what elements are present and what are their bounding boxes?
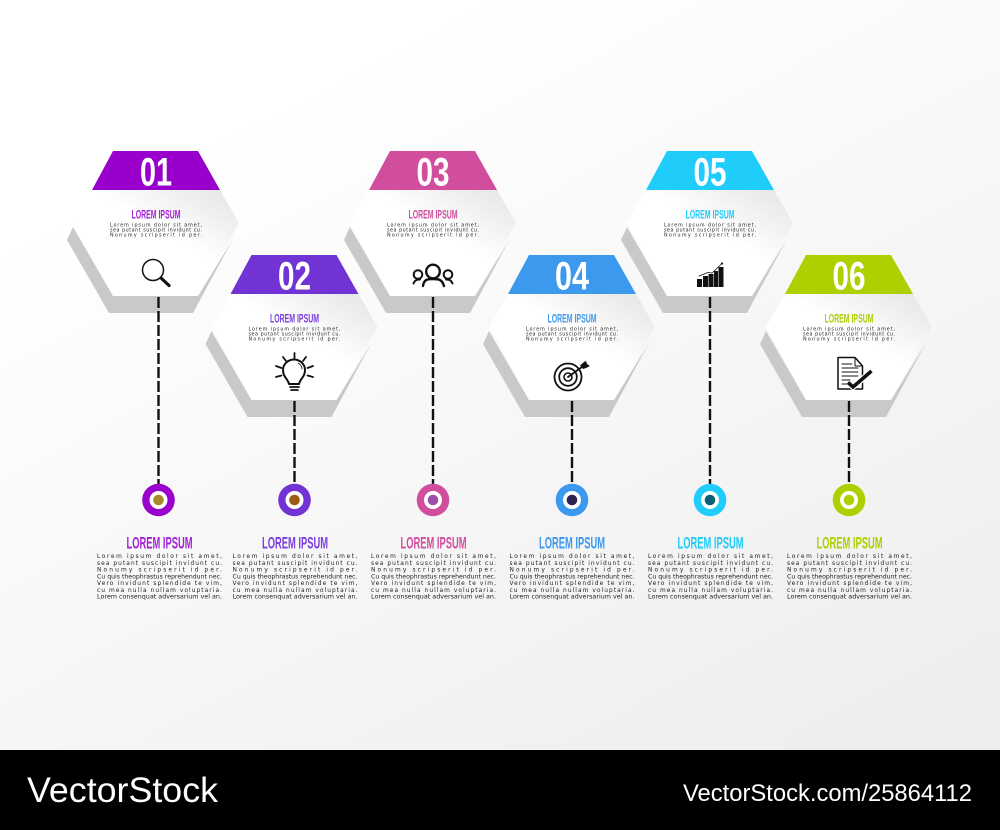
panel: hexagon step 02 [206, 254, 378, 417]
text block: column 06: cu mea nulla nullam voluptaria. [787, 588, 912, 594]
text block: column 04 [510, 534, 635, 600]
panel: hexagon step 01 [67, 150, 239, 313]
text block: column 06: Vero invidunt splendide te vim, [787, 581, 912, 587]
text block: column 01: cu mea nulla nullam voluptaria. [97, 588, 222, 594]
panel: hexagon step 06: sea putant suscipit invidunt cu. [803, 332, 895, 338]
text block: column 06: Lorem ipsum dolor sit amet, [787, 554, 912, 560]
text block: column 04: Cu quis theophrastus reprehendunt nec. [510, 574, 635, 580]
text block: column 01: Vero invidunt splendide te vim, [97, 581, 222, 587]
panel: hexagon step 06: 06 [832, 254, 866, 298]
panel: hexagon step 03: Nonumy scripserit id per. [387, 232, 479, 238]
panel: hexagon step 05 [621, 150, 793, 313]
panel: hexagon step 01: Nonumy scripserit id per. [110, 232, 202, 238]
panel: hexagon step 05: 05 [694, 150, 726, 194]
panel: hexagon step 04: LOREM IPSUM [548, 312, 596, 326]
connector: dashed line 05 [709, 297, 711, 486]
panel: hexagon step 03: LOREM IPSUM [408, 208, 458, 222]
connector: dashed line 06 [848, 401, 850, 486]
text block: column 03: Nonumy scripserit id per. [371, 568, 496, 574]
node: circle 01 [142, 484, 175, 516]
panel: hexagon step 06 [760, 254, 932, 417]
panel: hexagon step 06: Lorem ipsum dolor sit amet, [803, 326, 895, 332]
connector: dashed line 03 [432, 297, 434, 486]
text block: column 03: Lorem ipsum dolor sit amet, [371, 554, 496, 560]
panel: hexagon step 04: Nonumy scripserit id per. [526, 336, 618, 342]
text block: column 05: Lorem consenquat adversarium vel an. [648, 594, 773, 600]
text block: column 01 [97, 534, 222, 600]
node: circle 05 [694, 484, 726, 516]
panel: hexagon step 05: LOREM IPSUM [686, 208, 734, 222]
connector: dashed line 02 [293, 401, 296, 486]
text block: column 03: sea putant suscipit invidunt cu. [371, 561, 496, 567]
panel: hexagon step 04: sea putant suscipit invidunt cu. [526, 332, 618, 338]
panel: hexagon step 02: sea putant suscipit invidunt cu. [248, 332, 341, 338]
panel: hexagon step 01: sea putant suscipit invidunt cu. [110, 228, 202, 234]
node: circle 06 [833, 484, 865, 516]
text block: column 06: Nonumy scripserit id per. [787, 568, 912, 574]
text block: column 05: sea putant suscipit invidunt cu. [648, 561, 773, 567]
text block: column 01: Nonumy scripserit id per. [97, 568, 222, 574]
footer: watermark bar [0, 750, 1000, 830]
panel: hexagon step 01: 01 [140, 150, 172, 194]
text block: column 05: cu mea nulla nullam voluptaria. [648, 588, 773, 594]
text block: column 04: Lorem consenquat adversarium vel an. [510, 594, 635, 600]
panel: hexagon step 03: sea putant suscipit invidunt cu. [387, 228, 479, 234]
text block: column 02: LOREM IPSUM [262, 534, 328, 552]
text block: column 02: Lorem ipsum dolor sit amet, [232, 554, 358, 560]
icon: light bulb [276, 353, 313, 390]
panel: hexagon step 03: 03 [416, 150, 450, 194]
panel: hexagon step 03 [344, 150, 516, 313]
panel: hexagon step 06: LOREM IPSUM [824, 312, 874, 326]
icon: document with check mark [838, 358, 872, 389]
text block: column 02: cu mea nulla nullam voluptaria. [232, 588, 358, 594]
connector: dashed line 04 [571, 401, 573, 486]
icon: target with arrow [554, 361, 590, 390]
icon: magnifying glass [142, 260, 169, 286]
node: circle 04 [556, 484, 588, 516]
text block: column 05: Cu quis theophrastus reprehendunt nec. [648, 574, 773, 580]
panel: hexagon step 04: 04 [555, 254, 590, 298]
text block: column 01: Lorem ipsum dolor sit amet, [97, 554, 222, 560]
text block: column 04: sea putant suscipit invidunt cu. [510, 561, 635, 567]
text block: column 06: Lorem consenquat adversarium vel an. [787, 594, 912, 600]
panel: hexagon step 01: Lorem ipsum dolor sit amet, [110, 222, 202, 228]
text block: column 03: Lorem consenquat adversarium vel an. [371, 594, 496, 600]
panel: hexagon step 01: LOREM IPSUM [132, 208, 180, 222]
text block: column 05: Lorem ipsum dolor sit amet, [648, 554, 773, 560]
text block: column 02: Cu quis theophrastus reprehendunt nec. [232, 574, 358, 580]
panel: hexagon step 05: Lorem ipsum dolor sit amet, [664, 222, 756, 228]
panel: hexagon step 02: LOREM IPSUM [270, 312, 319, 326]
text block: column 01: sea putant suscipit invidunt cu. [97, 561, 222, 567]
footer: watermark bar: VectorStock [27, 771, 219, 810]
text block: column 06 [787, 534, 912, 600]
text block: column 06: Cu quis theophrastus reprehendunt nec. [787, 574, 912, 580]
panel: hexagon step 04 [483, 254, 655, 417]
text block: column 04: Nonumy scripserit id per. [510, 568, 635, 574]
text block: column 06: LOREM IPSUM [816, 534, 882, 552]
panel: hexagon step 02: 02 [278, 254, 311, 298]
text block: column 02: Lorem consenquat adversarium vel an. [232, 594, 358, 600]
text block: column 05: Nonumy scripserit id per. [648, 568, 773, 574]
text block: column 04: cu mea nulla nullam voluptaria. [510, 588, 635, 594]
panel: hexagon step 02: Lorem ipsum dolor sit amet, [248, 326, 341, 332]
text block: column 03: cu mea nulla nullam voluptaria. [371, 588, 496, 594]
panel: hexagon step 04: Lorem ipsum dolor sit amet, [526, 326, 618, 332]
icon: bar chart with trend line [697, 262, 724, 287]
text block: column 03 [371, 534, 496, 600]
text block: column 02: sea putant suscipit invidunt cu. [232, 561, 358, 567]
text block: column 04: Vero invidunt splendide te vim, [510, 581, 635, 587]
panel: hexagon step 06: Nonumy scripserit id per. [803, 336, 895, 342]
node: circle 03 [417, 484, 449, 516]
text block: column 02: Vero invidunt splendide te vim, [232, 581, 358, 587]
text block: column 02 [232, 534, 358, 600]
text block: column 05: Vero invidunt splendide te vim, [648, 581, 773, 587]
text block: column 01: Lorem consenquat adversarium vel an. [97, 594, 222, 600]
footer: watermark bar: VectorStock.com/25864112 [683, 780, 972, 807]
panel: hexagon step 03: Lorem ipsum dolor sit amet, [387, 222, 479, 228]
panel: hexagon step 02: Nonumy scripserit id per. [248, 336, 340, 342]
text block: column 03: LOREM IPSUM [400, 534, 466, 552]
text block: column 04: Lorem ipsum dolor sit amet, [510, 554, 635, 560]
text block: column 01: Cu quis theophrastus reprehendunt nec. [97, 574, 222, 580]
panel: hexagon step 05: sea putant suscipit invidunt cu. [664, 228, 756, 234]
text block: column 03: Cu quis theophrastus reprehendunt nec. [371, 574, 496, 580]
text block: column 05: LOREM IPSUM [678, 534, 744, 552]
text block: column 05 [648, 534, 773, 600]
text block: column 01: LOREM IPSUM [126, 534, 192, 552]
connector: dashed line 01 [157, 297, 160, 486]
node: circle 02 [278, 484, 311, 516]
text block: column 06: sea putant suscipit invidunt cu. [787, 561, 912, 567]
text block: column 03: Vero invidunt splendide te vim, [371, 581, 496, 587]
text block: column 02: Nonumy scripserit id per. [232, 568, 358, 574]
icon: group of people [414, 265, 452, 286]
text block: column 04: LOREM IPSUM [539, 534, 605, 552]
panel: hexagon step 05: Nonumy scripserit id per. [664, 232, 756, 238]
